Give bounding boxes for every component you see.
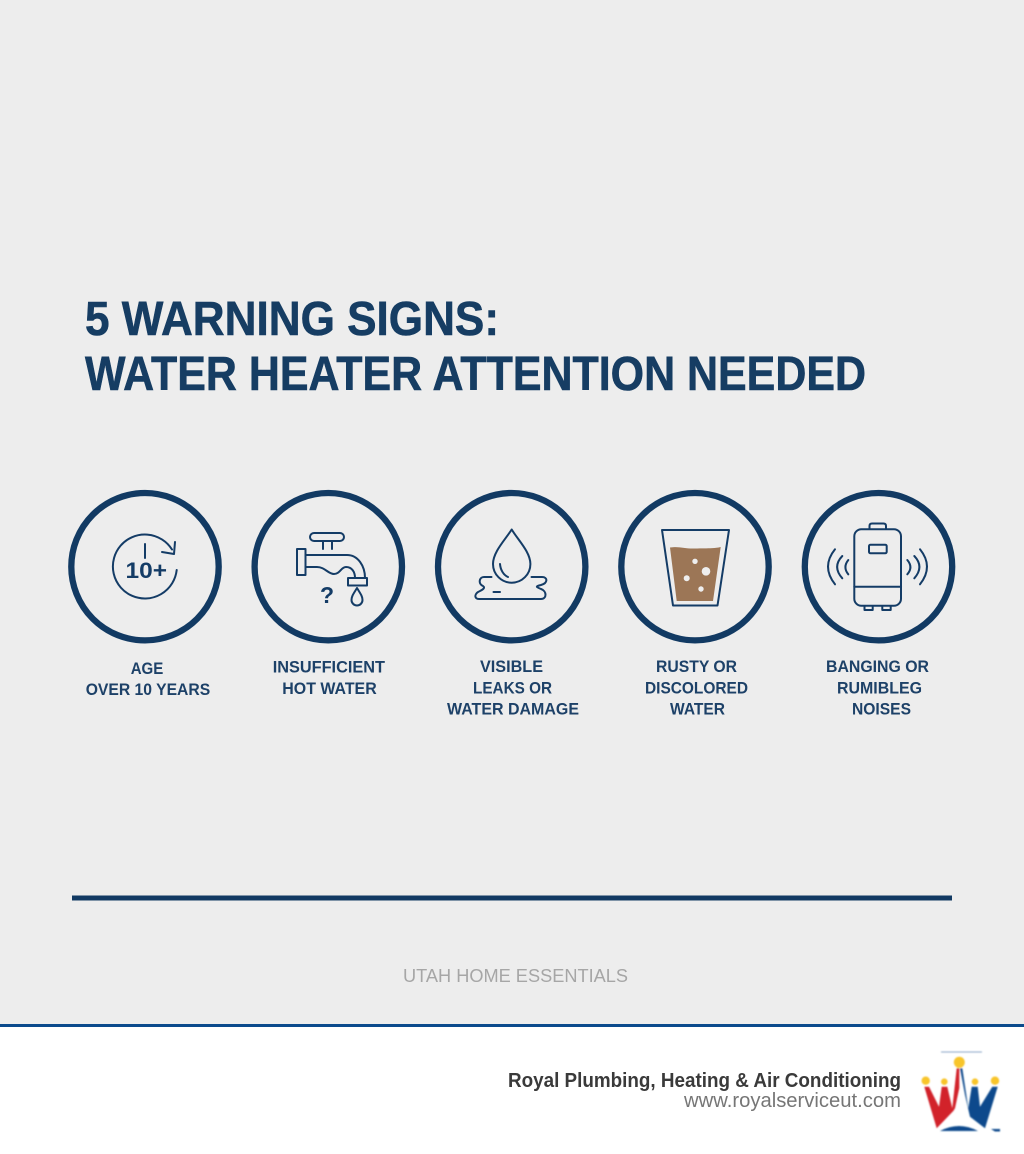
panel: banging or rumbling noises — [805, 493, 952, 718]
label: INSUFFICIENT — [273, 658, 386, 677]
label: WATER — [670, 699, 725, 718]
label: RUSTY OR — [656, 657, 737, 676]
ring — [438, 493, 585, 640]
label — [447, 657, 579, 718]
title: 5 WARNING SIGNS: — [85, 293, 499, 346]
label: LEAKS OR — [473, 678, 552, 697]
label: NOISES — [852, 699, 911, 718]
icon: faucet with question mark: ? — [320, 582, 334, 608]
label: OVER 10 YEARS — [86, 680, 210, 699]
ring — [255, 493, 402, 640]
footer band — [0, 1024, 1024, 1154]
label: VISIBLE — [480, 657, 543, 676]
tagline: UTAH HOME ESSENTIALS — [403, 966, 628, 986]
label — [273, 658, 386, 698]
icon: clock with 10+ — [113, 535, 177, 599]
label — [826, 657, 929, 718]
company name: Royal Plumbing, Heating & Air Conditioning — [508, 1070, 901, 1092]
panel: rusty or discolored water — [621, 493, 769, 718]
label: BANGING OR — [826, 657, 929, 676]
label: RUMIBLEG — [837, 678, 922, 697]
panel: age over 10 years — [71, 493, 219, 699]
icon: water heater with sound waves — [828, 524, 927, 610]
icon: glass of rusty water — [662, 530, 729, 606]
logo: crown — [922, 1052, 1000, 1132]
label: HOT WATER — [282, 679, 377, 698]
label: DISCOLORED — [645, 678, 748, 697]
ring — [71, 493, 219, 640]
ring — [805, 493, 952, 640]
label — [86, 659, 210, 699]
icon: clock with 10+: 10+ — [126, 558, 167, 583]
title — [85, 293, 866, 401]
label: WATER DAMAGE — [447, 699, 579, 718]
title: WATER HEATER ATTENTION NEEDED — [85, 348, 866, 401]
icon: water drop and puddle — [475, 530, 546, 599]
label — [645, 657, 748, 718]
ring — [621, 493, 769, 640]
label: AGE — [131, 659, 163, 678]
icon: faucet with question mark — [297, 533, 367, 608]
website: www.royalserviceut.com — [683, 1090, 901, 1112]
panel: visible leaks or water damage — [438, 493, 585, 718]
panel: insufficient hot water — [255, 493, 402, 698]
